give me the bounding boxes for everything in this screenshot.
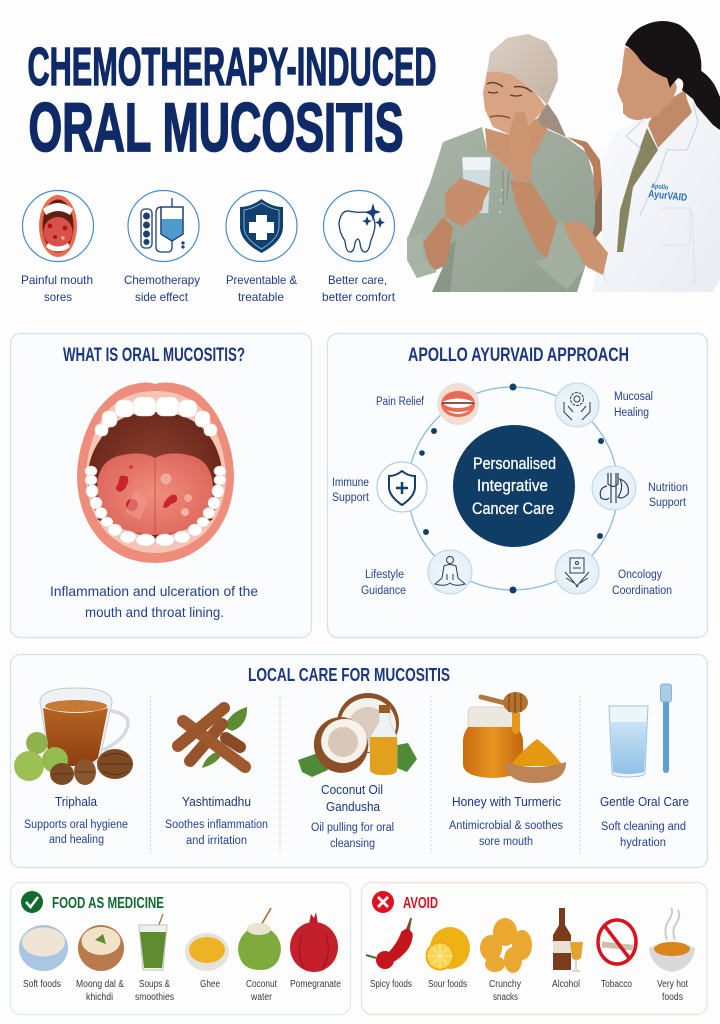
doctor ponytail	[692, 70, 720, 130]
heading: LOCAL CARE FOR MUCOSITIS	[248, 665, 450, 685]
doctor hand on arm	[563, 222, 608, 275]
header icon labels: better comfort	[322, 290, 396, 304]
doctor arm behind patient	[590, 183, 602, 245]
item: honey with turmeric: Antimicrobial & soothes	[449, 820, 563, 832]
header icon labels: side effect	[135, 290, 189, 304]
node: oncology coordination: Coordination	[612, 585, 672, 597]
lower teeth	[85, 466, 226, 546]
scarf tail	[538, 103, 566, 137]
food: coconut water: Coconut	[246, 979, 277, 990]
food: moong dal and khichdi: Moong dal &	[76, 979, 124, 990]
illustration: open mouth with ulcers	[77, 382, 234, 563]
header icon labels: Painful mouth	[21, 273, 93, 287]
food: soups and smoothies	[135, 914, 174, 1003]
food: pomegranate: Pomegranate	[290, 979, 341, 990]
header icon labels: sores	[44, 290, 72, 304]
patient right forearm	[510, 180, 557, 258]
panel: apollo ayurvaid approach	[328, 334, 708, 638]
node: lifestyle guidance: Guidance	[361, 585, 406, 597]
item: coconut oil gandusha	[298, 693, 417, 850]
heading with cross icon	[372, 891, 438, 913]
node: nutrition support: Support	[649, 497, 687, 509]
node: mucosal healing: Mucosal	[614, 391, 653, 403]
node: pain relief	[376, 384, 478, 424]
node: pain relief: Pain Relief	[376, 396, 425, 408]
patient neck	[485, 118, 548, 170]
item: triphala: and healing	[49, 834, 104, 846]
dividers	[150, 696, 580, 853]
doctor coat	[592, 102, 720, 292]
food: moong dal and khichdi	[76, 925, 124, 1003]
item: coconut oil gandusha: Gandusha	[326, 800, 380, 814]
food: very hot foods: foods	[662, 992, 683, 1003]
item: coconut oil gandusha: Oil pulling for oral	[311, 822, 394, 834]
doctor hand on shoulder	[567, 137, 602, 203]
icon: chemotherapy drip	[128, 190, 199, 262]
food: crunchy snacks	[480, 918, 532, 1003]
food: moong dal and khichdi: khichdi	[86, 992, 113, 1003]
food: ghee: Ghee	[200, 979, 220, 990]
header icon labels: Preventable &	[226, 273, 297, 287]
title: ORAL MUCOSITIS	[28, 89, 404, 166]
panel: avoid	[362, 882, 707, 1014]
panel: food as medicine	[10, 882, 350, 1014]
center circle	[453, 425, 575, 547]
caption: Inflammation and ulceration of the	[50, 583, 258, 599]
food: very hot foods: Very hot	[657, 979, 688, 990]
patient right hand on cheek	[508, 112, 533, 182]
food: spicy foods	[366, 918, 412, 990]
coat logo: AyurVAID	[648, 188, 688, 204]
node: mucosal healing	[555, 383, 653, 427]
center circle: Cancer Care	[472, 499, 554, 518]
item: coconut oil gandusha: Coconut Oil	[321, 783, 383, 797]
item: coconut oil gandusha: cleansing	[330, 838, 375, 850]
center circle: Integrative	[477, 476, 548, 495]
doctor neck	[647, 90, 690, 150]
patient left cuff	[407, 233, 437, 278]
item: yashtimadhu: Yashtimadhu	[182, 795, 251, 809]
ring with dots	[408, 384, 618, 594]
patient shirt	[407, 127, 595, 292]
patient face	[483, 71, 546, 135]
coat logo: Apollo	[651, 183, 668, 192]
node: lifestyle guidance	[361, 550, 472, 597]
food: soups and smoothies: smoothies	[135, 992, 174, 1003]
node: immune support: Immune	[332, 477, 369, 489]
item: yashtimadhu	[165, 707, 268, 847]
caption	[50, 583, 258, 620]
food: alcohol: Alcohol	[552, 979, 580, 990]
glass of water	[462, 157, 491, 213]
heading with check icon: FOOD AS MEDICINE	[52, 895, 164, 912]
icon: shield with cross	[226, 190, 297, 262]
item: honey with turmeric	[449, 692, 566, 848]
doctor neck v	[648, 92, 692, 148]
upper teeth	[95, 397, 217, 436]
food: soft foods	[19, 925, 68, 990]
item: yashtimadhu: Soothes inflammation	[165, 819, 268, 831]
heading with check icon	[21, 891, 164, 913]
food: soups and smoothies: Soups &	[139, 979, 170, 990]
node: mucosal healing: Healing	[614, 407, 649, 419]
coat lapels	[626, 102, 698, 215]
food: coconut water	[238, 908, 281, 1003]
item: gentle oral care	[600, 684, 689, 849]
heading: APOLLO AYURVAID APPROACH	[408, 345, 629, 366]
ulcers	[116, 476, 128, 492]
doctor inner shirt	[617, 128, 658, 252]
header icon labels: treatable	[238, 290, 284, 304]
food: sour foods	[426, 927, 470, 990]
food: crunchy snacks: Crunchy	[489, 979, 521, 990]
item: gentle oral care: Soft cleaning and	[601, 821, 686, 833]
coat logo	[648, 183, 688, 204]
item: triphala	[14, 688, 133, 846]
title	[28, 37, 436, 166]
heading: WHAT IS ORAL MUCOSITIS?	[63, 345, 245, 366]
food: soft foods: Soft foods	[23, 979, 61, 990]
item: gentle oral care: Gentle Oral Care	[600, 795, 689, 809]
node: oncology coordination: Oncology	[618, 569, 662, 581]
icon: painful mouth sores	[22, 190, 94, 262]
item: gentle oral care: hydration	[620, 837, 666, 849]
node: immune support: Support	[332, 492, 370, 504]
node: immune support	[332, 462, 427, 512]
food: tobacco: Tobacco	[601, 979, 632, 990]
patient headscarf	[487, 34, 558, 105]
item: triphala: Supports oral hygiene	[24, 819, 128, 831]
item: triphala: Triphala	[55, 795, 97, 809]
item: yashtimadhu: and irritation	[186, 835, 247, 847]
patient left hand	[445, 178, 490, 227]
node: lifestyle guidance: Lifestyle	[365, 569, 404, 581]
item: honey with turmeric: sore mouth	[479, 836, 533, 848]
header icon labels: Better care,	[328, 273, 387, 287]
center circle: Personalised	[473, 454, 556, 473]
patient left forearm	[423, 217, 453, 272]
food: alcohol	[552, 908, 583, 990]
node: nutrition support: Nutrition	[648, 482, 688, 494]
food: tobacco	[598, 920, 636, 990]
food: very hot foods	[649, 908, 695, 1003]
food: sour foods: Sour foods	[428, 979, 467, 990]
caption: mouth and throat lining.	[85, 604, 224, 620]
icon: tooth with sparkles	[324, 190, 394, 262]
patient right cuff	[535, 222, 585, 290]
doctor face	[617, 47, 677, 120]
food: pomegranate	[290, 912, 341, 990]
header icon labels	[21, 273, 396, 304]
header icon labels: Chemotherapy	[124, 273, 200, 287]
food: spicy foods: Spicy foods	[370, 979, 412, 990]
food: ghee	[185, 933, 229, 990]
food: coconut water: water	[250, 992, 273, 1003]
node: nutrition support	[592, 466, 688, 510]
food: crunchy snacks: snacks	[493, 992, 518, 1003]
panel: local care for mucositis	[10, 654, 708, 868]
node: oncology coordination	[555, 550, 672, 597]
doctor hair	[625, 21, 701, 100]
heading with cross icon: AVOID	[403, 895, 438, 912]
header icon row	[21, 190, 396, 304]
panel: what is oral mucositis	[10, 334, 312, 638]
illustration: patient and doctor	[407, 21, 720, 292]
item: honey with turmeric: Honey with Turmeric	[452, 795, 561, 809]
